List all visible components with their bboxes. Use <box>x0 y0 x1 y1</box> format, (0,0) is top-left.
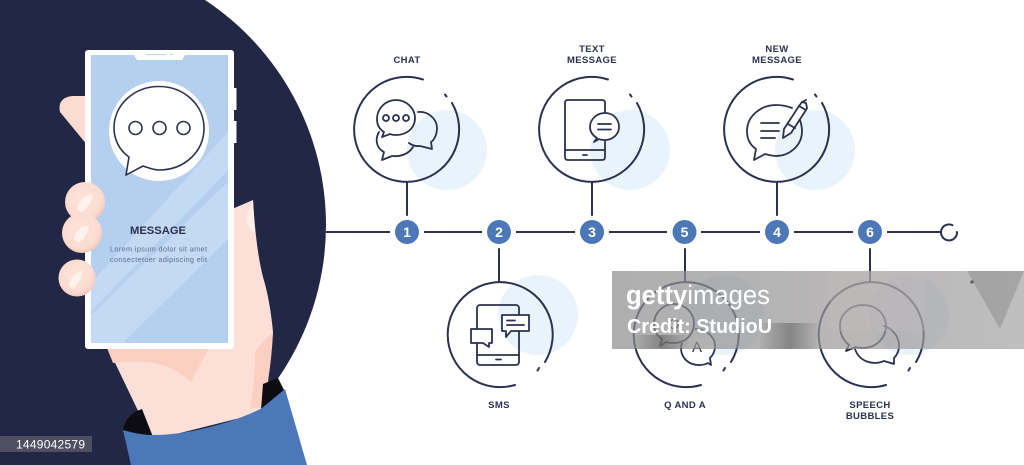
ring <box>634 282 739 387</box>
label: BUBBLES <box>846 411 894 422</box>
dark circular background <box>0 0 326 465</box>
white disc <box>109 81 209 181</box>
icon: bubble with pencil <box>747 100 807 160</box>
wrist side shadow <box>250 332 273 408</box>
label: NEW <box>765 44 789 55</box>
number badge <box>672 220 696 244</box>
backdrop circle <box>684 275 764 355</box>
number badge: 2 <box>495 224 503 240</box>
number badge <box>580 220 604 244</box>
illustration: hand holding phone <box>58 50 307 465</box>
timeline line <box>326 231 942 233</box>
icon: q and a bubbles <box>654 304 715 365</box>
gripping fingers <box>58 182 105 296</box>
step 3: text message <box>539 44 670 244</box>
timeline end marker <box>941 224 957 240</box>
index fingertip behind phone <box>60 96 88 146</box>
backdrop circle <box>498 275 578 355</box>
icon: overlapping bubbles <box>840 305 899 364</box>
phone body text <box>110 244 207 264</box>
number badge: 6 <box>866 224 874 240</box>
icon: q and a bubbles: A <box>692 339 702 356</box>
backdrop circle <box>869 275 949 355</box>
number badge <box>395 220 419 244</box>
number badge <box>487 220 511 244</box>
connector <box>869 249 871 282</box>
connector <box>406 182 408 215</box>
large message bubble icon <box>109 81 209 181</box>
palm and thumb <box>107 200 273 440</box>
step 6: speech bubbles <box>819 220 949 422</box>
ring <box>819 282 924 387</box>
connector <box>684 249 686 282</box>
number badge <box>858 220 882 244</box>
ring <box>724 77 829 182</box>
backdrop circle <box>407 110 487 190</box>
phone body text: Lorem ipsum dolor sit amet <box>110 244 207 254</box>
backdrop circle <box>590 110 670 190</box>
number badge: 5 <box>681 224 689 240</box>
phone speaker <box>146 54 173 56</box>
label: CHAT <box>393 55 421 66</box>
speech bubble <box>114 86 204 175</box>
number badge: 3 <box>588 224 596 240</box>
phone body <box>85 50 234 349</box>
phone <box>85 50 236 349</box>
phone side buttons <box>234 88 236 143</box>
image id tag <box>0 436 92 452</box>
step 4: new message <box>724 44 855 244</box>
step 2: sms <box>448 220 578 411</box>
connector <box>776 182 778 215</box>
watermark credit: Credit: StudioU <box>627 316 772 338</box>
label: Q AND A <box>664 400 706 411</box>
watermark logo: gettyimages <box>626 280 770 310</box>
ring <box>354 77 459 182</box>
icon: chat bubbles <box>377 100 437 160</box>
number badge: 1 <box>403 224 411 240</box>
label: TEXT <box>579 44 605 55</box>
watermark band <box>612 271 1024 349</box>
ring <box>539 77 644 182</box>
ring <box>448 282 553 387</box>
sleeve <box>123 389 307 465</box>
watermark texture <box>967 271 1024 329</box>
phone screen <box>91 55 228 343</box>
image id tag: 1449042579 <box>16 438 85 452</box>
connector <box>498 249 500 282</box>
screen glare <box>91 132 228 343</box>
thumb nail <box>247 200 255 234</box>
number badge: 4 <box>773 224 781 240</box>
connector <box>591 182 593 215</box>
palm shadow <box>107 348 209 382</box>
label: SMS <box>488 400 510 411</box>
icon: phone with messages <box>471 305 529 365</box>
phone body text: consectetuer adipiscing elit <box>110 255 207 264</box>
backdrop circle <box>775 110 855 190</box>
phone title: MESSAGE <box>130 225 186 237</box>
step 5: q and a <box>634 220 764 411</box>
sleeve opening <box>123 378 285 437</box>
step 1: chat <box>354 55 487 244</box>
three dots <box>129 122 190 134</box>
label: MESSAGE <box>752 55 802 66</box>
number badge <box>765 220 789 244</box>
icon: tablet message <box>565 100 619 160</box>
icon: q and a bubbles: Q <box>668 316 680 333</box>
label: SPEECH <box>849 400 891 411</box>
label: MESSAGE <box>567 55 617 66</box>
